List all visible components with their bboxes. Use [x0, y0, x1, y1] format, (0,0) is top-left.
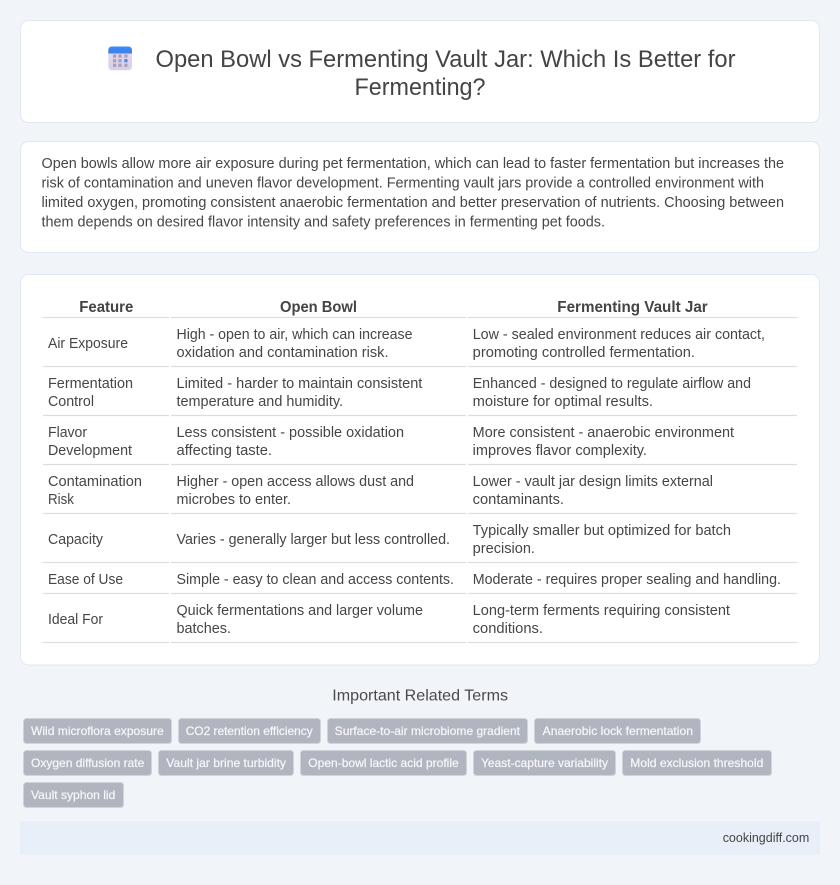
tag: Surface-to-air microbiome gradient: [335, 724, 521, 738]
row: ideal for: batches.: [176, 621, 231, 637]
row: air exposure: High - open to air, which can increase: [176, 327, 413, 343]
heading: important related terms: Important Related Terms: [332, 688, 508, 705]
icon: calendar: [108, 46, 132, 70]
panel: title header: [20, 20, 820, 122]
row: fermentation control: [48, 376, 751, 410]
row: air exposure: Air Exposure: [48, 336, 128, 352]
tag: [328, 718, 528, 744]
tag: [300, 750, 466, 776]
row: capacity: Typically smaller but optimized for batch: [473, 523, 731, 539]
tag: Vault jar brine turbidity: [166, 756, 286, 770]
panel: intro paragraph: Open bowls allow more air exposure during pet fermentation, which can lead to faster fermentation but increases the: [42, 156, 784, 172]
row: contamination risk: Contamination: [48, 474, 142, 490]
tag: Yeast-capture variability: [481, 756, 608, 770]
row: flavor development: Less consistent - possible oxidation: [176, 425, 404, 441]
row: flavor development: Flavor: [48, 425, 87, 441]
tag: [24, 782, 124, 808]
row: fermentation control: Fermentation: [48, 376, 133, 392]
row: capacity: precision.: [473, 541, 535, 557]
row: capacity: [48, 523, 731, 557]
tag: [622, 750, 772, 776]
row: fermentation control: Enhanced - designed to regulate airflow and: [473, 376, 751, 392]
tag: Oxygen diffusion rate: [31, 756, 145, 770]
tag: Anaerobic lock fermentation: [543, 724, 693, 738]
row: air exposure: [48, 327, 765, 361]
row: contamination risk: microbes to enter.: [176, 492, 291, 508]
tag: [24, 750, 152, 776]
row: fermentation control: moisture for optimal results.: [473, 394, 653, 410]
panel: intro paragraph: them depends on desired flavor intensity and safety preferences in fermenting pet foods.: [42, 214, 605, 230]
related term tags: [24, 718, 772, 808]
panel: comparison table: [20, 274, 820, 665]
tag: Open-bowl lactic acid profile: [308, 756, 459, 770]
row: ideal for: Quick fermentations and larger volume: [176, 603, 423, 619]
row: fermentation control: temperature and humidity.: [176, 394, 343, 410]
tag: [474, 750, 616, 776]
panel: intro paragraph: [20, 142, 820, 252]
table header row: [79, 299, 708, 316]
footer bar: [20, 821, 820, 855]
title text: Open Bowl vs Fermenting Vault Jar: Which Is Better for: [156, 46, 736, 73]
footer bar: cookingdiff.com: [723, 831, 809, 845]
tag: Vault syphon lid: [31, 788, 115, 802]
row: capacity: Capacity: [48, 532, 104, 548]
row: fermentation control: Control: [48, 394, 94, 410]
row: ease of use: Simple - easy to clean and access contents.: [176, 572, 454, 588]
row: ideal for: conditions.: [473, 621, 543, 637]
row: ease of use: Moderate - requires proper sealing and handling.: [473, 572, 781, 588]
row: flavor development: improves flavor complexity.: [473, 443, 647, 459]
table header row: Fermenting Vault Jar: [557, 299, 708, 316]
row: contamination risk: Lower - vault jar design limits external: [473, 474, 713, 490]
row: contamination risk: Higher - open access allows dust and: [176, 474, 414, 490]
row: ease of use: [48, 572, 781, 588]
row: ease of use: Ease of Use: [48, 572, 123, 588]
tag: [178, 718, 320, 744]
row: air exposure: promoting controlled fermentation.: [473, 345, 695, 361]
tag: CO2 retention efficiency: [186, 724, 313, 738]
row: air exposure: oxidation and contamination risk.: [176, 345, 388, 361]
row: fermentation control: Limited - harder to maintain consistent: [176, 376, 422, 392]
table header row: Open Bowl: [280, 299, 357, 316]
panel: intro paragraph: limited oxygen, promoting consistent anaerobic fermentation and better preservation of nutrients. Choosing between: [42, 195, 784, 211]
row: flavor development: More consistent - anaerobic environment: [473, 425, 734, 441]
row: ideal for: Long-term ferments requiring consistent: [473, 603, 730, 619]
row: flavor development: [48, 425, 734, 459]
row: capacity: Varies - generally larger but less controlled.: [176, 532, 450, 548]
row: flavor development: Development: [48, 443, 132, 459]
panel: intro paragraph: risk of contamination and uneven flavor development. Fermenting vault jars provide a controlled environment with: [42, 176, 764, 192]
row: ideal for: [48, 603, 730, 637]
tag: Mold exclusion threshold: [630, 756, 763, 770]
title text: [156, 46, 736, 101]
tag: [534, 718, 700, 744]
tag: [24, 718, 172, 744]
row: contamination risk: [48, 474, 713, 508]
row: ideal for: Ideal For: [48, 612, 103, 628]
title text: Fermenting?: [354, 74, 486, 101]
table header row: Feature: [79, 299, 134, 316]
row: air exposure: Low - sealed environment reduces air contact,: [473, 327, 765, 343]
row: flavor development: affecting taste.: [176, 443, 272, 459]
row: contamination risk: contaminants.: [473, 492, 564, 508]
row: contamination risk: Risk: [48, 492, 75, 508]
tag: Wild microflora exposure: [31, 724, 164, 738]
tag: [158, 750, 294, 776]
